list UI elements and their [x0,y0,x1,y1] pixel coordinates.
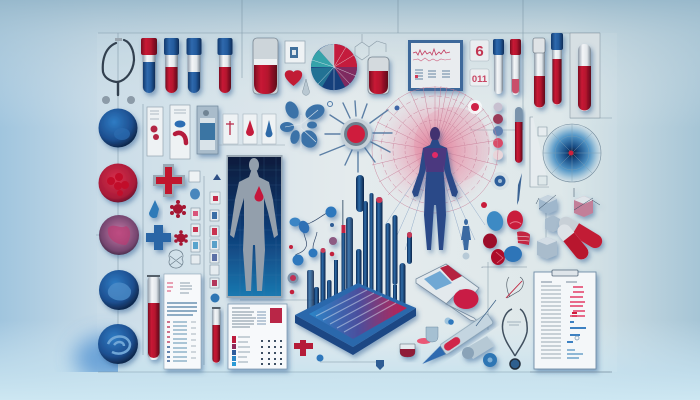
card: digital readout [470,69,489,86]
panel: body scan [226,155,282,298]
sphere: purple organ [99,215,139,255]
beaker: small blood vial [368,57,389,94]
small circle icons column [493,102,503,160]
vial: medium red [515,107,522,163]
icon: red sphere with rays [320,101,392,172]
vial: horizontal capsule [462,336,497,367]
tube: bottom middle [212,307,220,363]
molecule sketch [355,34,386,60]
sphere: blue swirl [98,324,138,364]
virus: red lower [174,230,188,246]
tube: bottom left [147,275,160,360]
stethoscope: bottom [476,300,527,369]
icon: blue pin [394,106,400,110]
organs cluster [483,209,530,265]
human figure: central blue [412,127,458,250]
molecule network [288,206,337,294]
pie chart [311,44,357,90]
capsules: red [555,214,605,262]
icon: heart [285,70,302,86]
drop icons: blue [149,200,159,218]
card: small target label [530,117,549,187]
icon: pink target dot [468,100,482,114]
icon: red cross small [294,340,313,356]
human figure: small [461,219,471,260]
test tubes: top right row [493,33,563,108]
sphere: red cells [98,164,138,202]
document: report left [164,274,201,369]
icon: drop under heart [302,79,310,95]
bar chart: glass columns [307,175,412,316]
small device card [285,41,305,63]
syringe [419,313,494,369]
icon: red dot [481,202,487,208]
card: number six [470,40,489,61]
monitor: waveform chart [408,40,463,91]
chain dots under board [316,354,384,370]
icon: pen [517,173,522,205]
device: blue canister [197,106,218,154]
human figure: grey mesh [230,158,278,291]
pill: red lozenge [454,289,478,309]
beaker: pink glow [417,318,454,344]
card: number six: 6 [475,43,484,60]
cubes [536,188,600,259]
icon stack: small cards [191,208,219,288]
tablet card [416,264,479,322]
stethoscope note [507,322,521,325]
sphere: blue lobes [99,270,139,310]
icon: round blue button [210,294,220,302]
cross: blue [146,225,171,250]
icon: compass mark [169,250,183,268]
target: radial scan [543,124,601,182]
sphere: blue textured [98,108,138,148]
clipboard: checklist [534,270,596,369]
radial pink diagram [371,86,499,250]
baseline rule [530,371,612,373]
beaker: large blood vial [253,38,278,94]
icon: top stethoscope [102,38,135,104]
document: report right [228,304,287,369]
note: stethoscope sketch [482,267,527,298]
panel: large vial [570,33,600,118]
card: digital readout: 011 [472,74,488,85]
icon columns: small cards beside cross [189,171,221,204]
cross: red [153,164,185,197]
virus: red top [170,200,186,218]
small beakers [400,344,415,357]
icon: blue leaf organ [280,99,327,151]
icon: round gauge [491,172,509,190]
platform: data board [295,283,416,355]
test tubes: top left row [141,38,232,93]
cards: small organ info cards [147,105,190,159]
cards: droplet row [218,114,285,145]
spheres column [98,108,139,364]
